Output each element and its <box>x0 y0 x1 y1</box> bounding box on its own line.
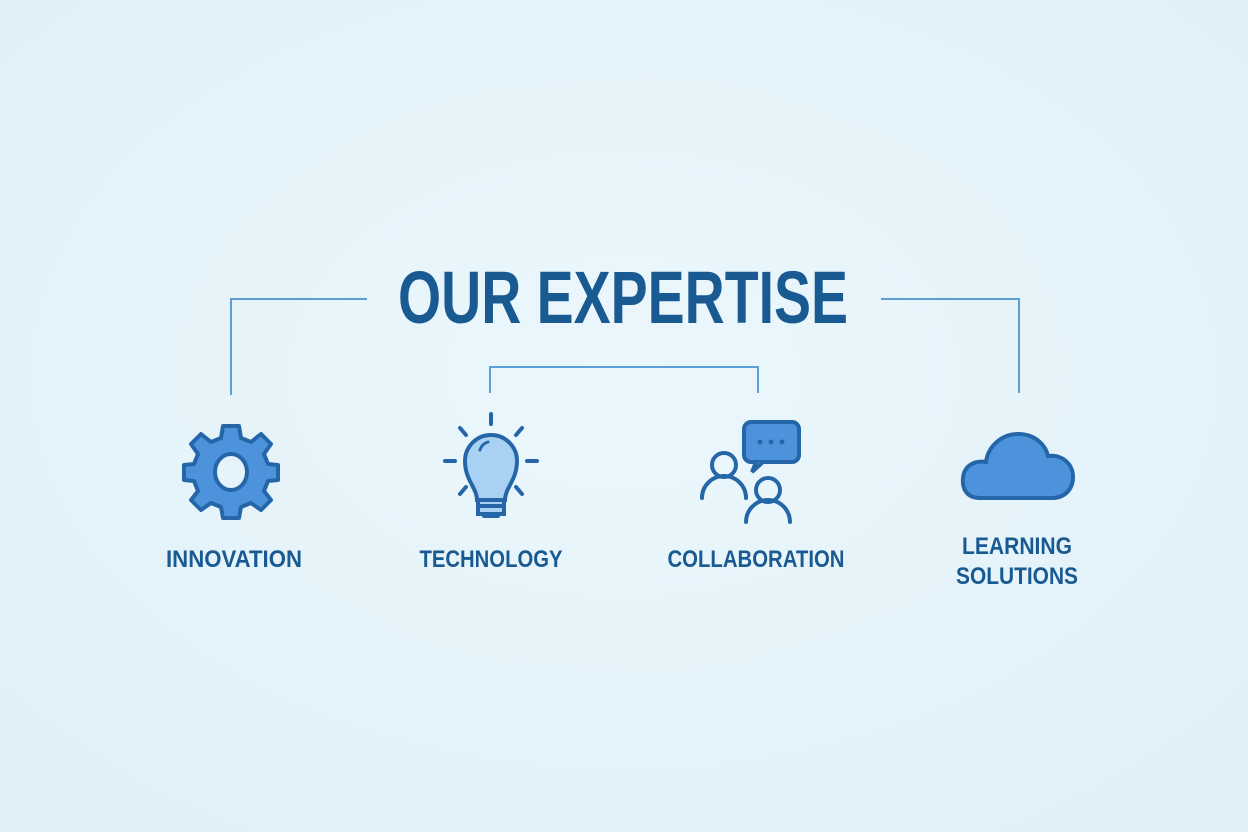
labels <box>166 533 1078 590</box>
icon: gear <box>184 426 278 518</box>
labels: SOLUTIONS <box>956 563 1078 590</box>
labels: COLLABORATION <box>668 546 844 573</box>
icon: light bulb <box>445 414 537 516</box>
connector lines <box>231 299 1019 395</box>
title: OUR EXPERTISE <box>398 256 848 339</box>
icon: people with speech bubble <box>702 422 799 522</box>
labels: LEARNING <box>962 533 1072 560</box>
labels: TECHNOLOGY <box>420 546 562 573</box>
labels: INNOVATION <box>166 546 302 573</box>
icon: cloud <box>963 434 1073 498</box>
